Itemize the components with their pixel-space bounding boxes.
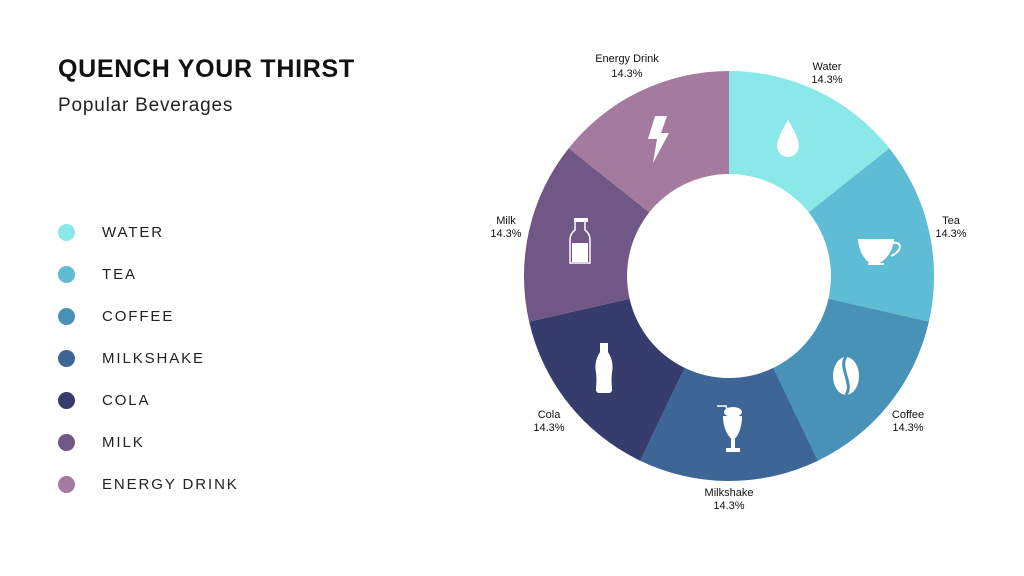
segment: energy drink bbox=[569, 71, 729, 212]
icon: coffee bean bbox=[833, 357, 859, 395]
legend: cola bbox=[58, 392, 150, 409]
legend: water bbox=[58, 224, 164, 241]
legend: energy drink bbox=[58, 476, 239, 493]
legend: COLA bbox=[102, 392, 150, 409]
legend: MILKSHAKE bbox=[102, 350, 205, 367]
legend: coffee bbox=[58, 308, 174, 325]
label: coffee bbox=[892, 409, 924, 434]
label: milk: 14.3% bbox=[490, 228, 522, 240]
subtitle: Popular Beverages bbox=[58, 95, 233, 116]
label: energy drink: 14.3% bbox=[611, 68, 643, 80]
label: coffee: Coffee bbox=[892, 409, 924, 421]
icon: lightning bbox=[648, 116, 669, 163]
legend: milk bbox=[58, 434, 145, 451]
segment: tea bbox=[809, 148, 934, 322]
legend: WATER bbox=[102, 224, 164, 241]
label: milkshake bbox=[705, 487, 753, 512]
legend: tea bbox=[58, 266, 137, 283]
label: milkshake: 14.3% bbox=[713, 500, 745, 512]
label: water bbox=[811, 61, 843, 86]
legend bbox=[58, 224, 239, 493]
label: water: Water bbox=[813, 61, 842, 73]
label: cola: 14.3% bbox=[533, 422, 565, 434]
icon: water drop bbox=[777, 120, 799, 157]
icon: cola bottle bbox=[595, 343, 613, 393]
segment: water bbox=[729, 71, 889, 212]
legend: COFFEE bbox=[102, 308, 174, 325]
legend: MILK bbox=[102, 434, 145, 451]
icon: tea cup bbox=[858, 239, 900, 265]
label: energy drink bbox=[595, 53, 659, 80]
segment: milkshake bbox=[640, 368, 818, 481]
icon: milk bottle bbox=[570, 218, 590, 263]
label: cola bbox=[533, 409, 565, 434]
segment: milk bbox=[524, 148, 649, 322]
icon: milkshake bbox=[717, 406, 742, 452]
legend: TEA bbox=[102, 266, 137, 283]
label: tea: Tea bbox=[942, 215, 961, 227]
label: cola: Cola bbox=[538, 409, 561, 421]
title: QUENCH YOUR THIRST bbox=[58, 55, 355, 83]
label: tea: 14.3% bbox=[935, 228, 967, 240]
segment: coffee bbox=[773, 299, 929, 461]
label: coffee: 14.3% bbox=[892, 422, 924, 434]
label: milk bbox=[490, 215, 522, 240]
legend: milkshake bbox=[58, 350, 205, 367]
legend: ENERGY DRINK bbox=[102, 476, 239, 493]
label: milk: Milk bbox=[496, 215, 516, 227]
segment: cola bbox=[529, 299, 685, 461]
label: tea bbox=[935, 215, 967, 240]
label: water: 14.3% bbox=[811, 74, 843, 86]
label: milkshake: Milkshake bbox=[705, 487, 753, 499]
label: energy drink: Energy Drink bbox=[595, 53, 659, 65]
